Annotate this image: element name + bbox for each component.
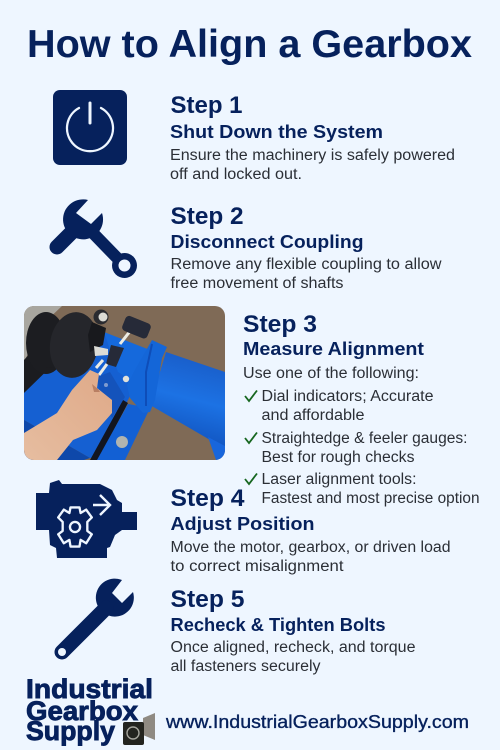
gauge and rods — [94, 346, 108, 356]
step 2 description — [170, 256, 442, 292]
bolt — [123, 376, 129, 382]
step 3 subheading: Measure Alignment — [243, 339, 424, 359]
step 1 heading: Step 1 — [170, 92, 242, 119]
step 2 description: free movement of shafts — [170, 275, 344, 292]
icon: motor with gear and arrow — [36, 480, 137, 558]
list item: dial indicators: Dial indicators; Accurate — [262, 388, 434, 405]
step 2 description: Remove any flexible coupling to allow — [170, 256, 442, 273]
blue base plate — [24, 334, 130, 458]
step 4 description — [170, 539, 450, 575]
list item: straightedge: Best for rough checks — [262, 449, 415, 466]
title: How to Align a Gearbox — [27, 23, 472, 66]
step 1 subheading: Shut Down the System — [170, 122, 383, 142]
logo wordmark — [26, 674, 153, 746]
step 5 description: all fasteners securely — [170, 658, 321, 675]
step 3 intro: Use one of the following: — [243, 365, 419, 382]
step 4 description: Move the motor, gearbox, or driven load — [170, 539, 450, 556]
list item: laser: Fastest and most precise option — [262, 490, 480, 507]
icon: power button — [53, 90, 127, 165]
icon: gearbox product — [123, 713, 155, 745]
list item: dial indicators — [245, 388, 434, 424]
step 4 heading: Step 4 — [170, 485, 245, 512]
step 3 — [243, 311, 480, 507]
step 5 — [58, 579, 416, 675]
photo: measuring alignment on blue gearbox — [24, 306, 225, 460]
step 4 subheading: Adjust Position — [170, 514, 314, 534]
list item: straightedge: Straightedge & feeler gauges: — [262, 430, 468, 447]
icon: wrench — [57, 199, 137, 278]
list item: laser — [245, 471, 480, 507]
step 2 subheading: Disconnect Coupling — [170, 232, 364, 252]
step 1 description: off and locked out. — [170, 166, 302, 183]
blue block under hand — [97, 372, 125, 418]
step 4 — [36, 480, 450, 575]
blue pipe — [150, 352, 225, 449]
step 1 — [53, 90, 455, 183]
list item: dial indicators: and affordable — [262, 407, 364, 424]
step 2 heading: Step 2 — [170, 203, 244, 230]
list item: laser: Laser alignment tools: — [262, 471, 416, 488]
logo wordmark: Gearbox — [26, 696, 138, 726]
step 5 subheading: Recheck & Tighten Bolts — [170, 615, 386, 635]
step 5 description: Once aligned, recheck, and torque — [170, 639, 416, 656]
icon: wrench — [58, 579, 134, 656]
logo — [26, 674, 155, 746]
black rubber coupling — [26, 312, 60, 374]
step 1 description — [170, 147, 455, 183]
step 2 — [57, 199, 442, 292]
hand and arm — [24, 370, 112, 460]
logo wordmark: Industrial — [26, 674, 153, 704]
dark gap and foot — [90, 400, 128, 460]
list item: straightedge — [245, 430, 468, 466]
step 3 heading: Step 3 — [243, 311, 317, 338]
website url: www.IndustrialGearboxSupply.com — [165, 712, 469, 732]
step 5 description — [170, 639, 416, 675]
pipe flange — [127, 340, 167, 413]
step 4 description: to correct misalignment — [170, 558, 344, 575]
logo wordmark: Supply — [26, 716, 115, 746]
step 5 heading: Step 5 — [170, 586, 244, 613]
step 1 description: Ensure the machinery is safely powered — [170, 147, 455, 164]
